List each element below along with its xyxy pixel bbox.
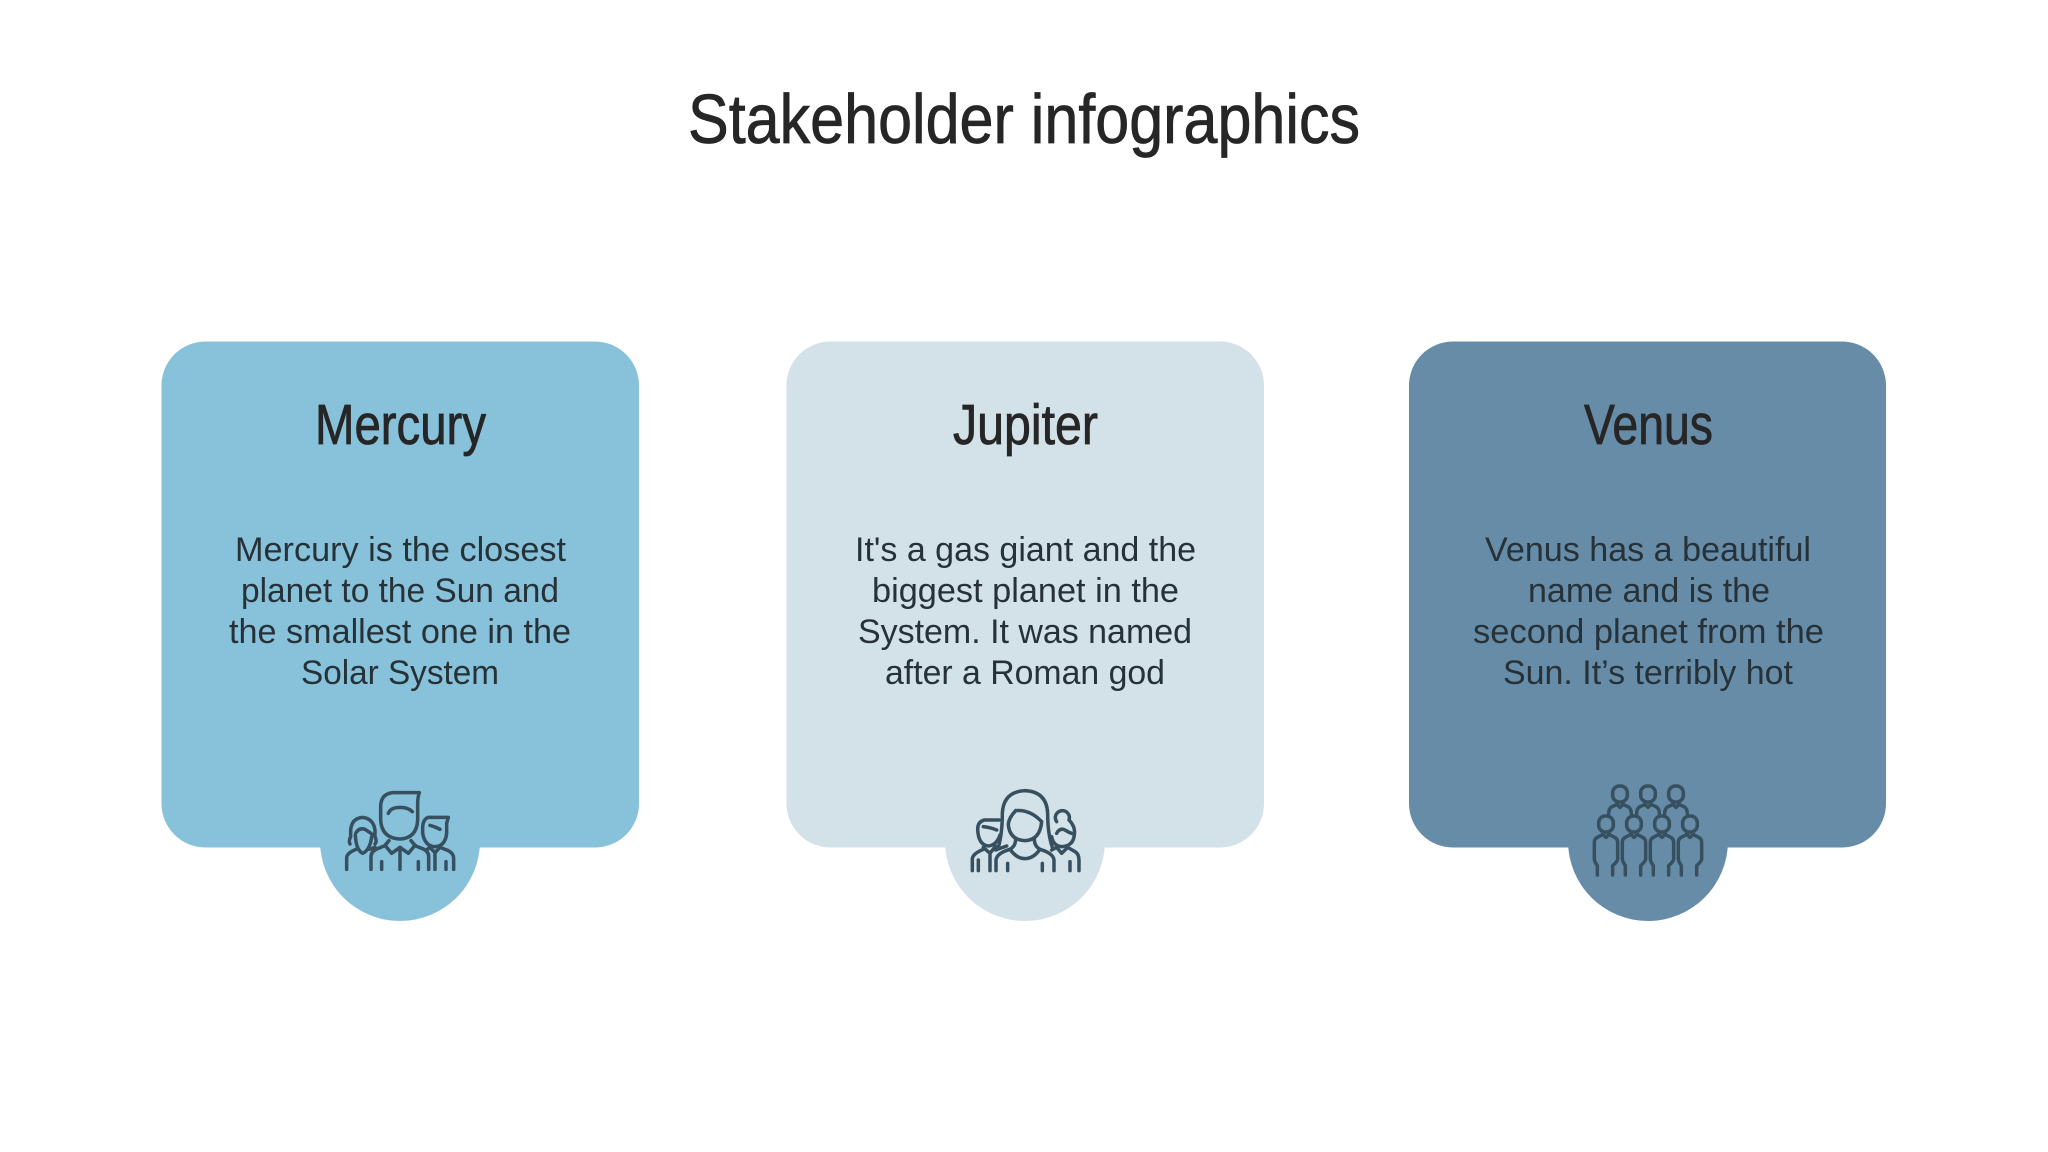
panel: Mercury bbox=[162, 342, 639, 921]
title: Stakeholder infographics bbox=[688, 80, 1360, 158]
heading: Mercury: Mercury bbox=[315, 393, 486, 457]
text: Mercury description: Solar System bbox=[301, 654, 499, 692]
card background: Mercury bbox=[162, 342, 639, 848]
icon: team with woman and two colleagues bbox=[972, 791, 1079, 871]
text: Jupiter description bbox=[855, 531, 1196, 692]
panel: Jupiter bbox=[786, 342, 1264, 921]
text: Mercury description bbox=[229, 531, 571, 692]
card background: Venus bbox=[1409, 342, 1886, 848]
text: Jupiter description: System. It was named bbox=[858, 613, 1192, 651]
panel: Venus bbox=[1409, 342, 1886, 921]
circle tab: Venus bbox=[1568, 761, 1728, 921]
card background: Jupiter bbox=[786, 342, 1264, 848]
text: Venus description bbox=[1473, 531, 1824, 692]
heading: Venus: Venus bbox=[1584, 393, 1713, 457]
text: Venus description: Sun. It’s terribly hot bbox=[1503, 654, 1794, 692]
text: Jupiter description: after a Roman god bbox=[885, 654, 1165, 692]
circle tab: Mercury bbox=[320, 761, 480, 921]
icon: team with man and two colleagues bbox=[347, 793, 454, 869]
text: Jupiter description: It's a gas giant and the bbox=[855, 531, 1196, 569]
text: Mercury description: the smallest one in the bbox=[229, 613, 571, 651]
text: Venus description: Venus has a beautiful bbox=[1485, 531, 1811, 569]
text: Mercury description: Mercury is the closest bbox=[235, 531, 567, 569]
text: Mercury description: planet to the Sun and bbox=[241, 572, 559, 610]
text: Jupiter description: biggest planet in the bbox=[872, 572, 1179, 610]
heading: Jupiter: Jupiter bbox=[953, 393, 1098, 457]
text: Venus description: second planet from the bbox=[1473, 613, 1824, 651]
icon: crowd of seven people bbox=[1594, 786, 1702, 875]
circle tab: Jupiter bbox=[945, 761, 1105, 921]
text: Venus description: name and is the bbox=[1528, 572, 1770, 610]
